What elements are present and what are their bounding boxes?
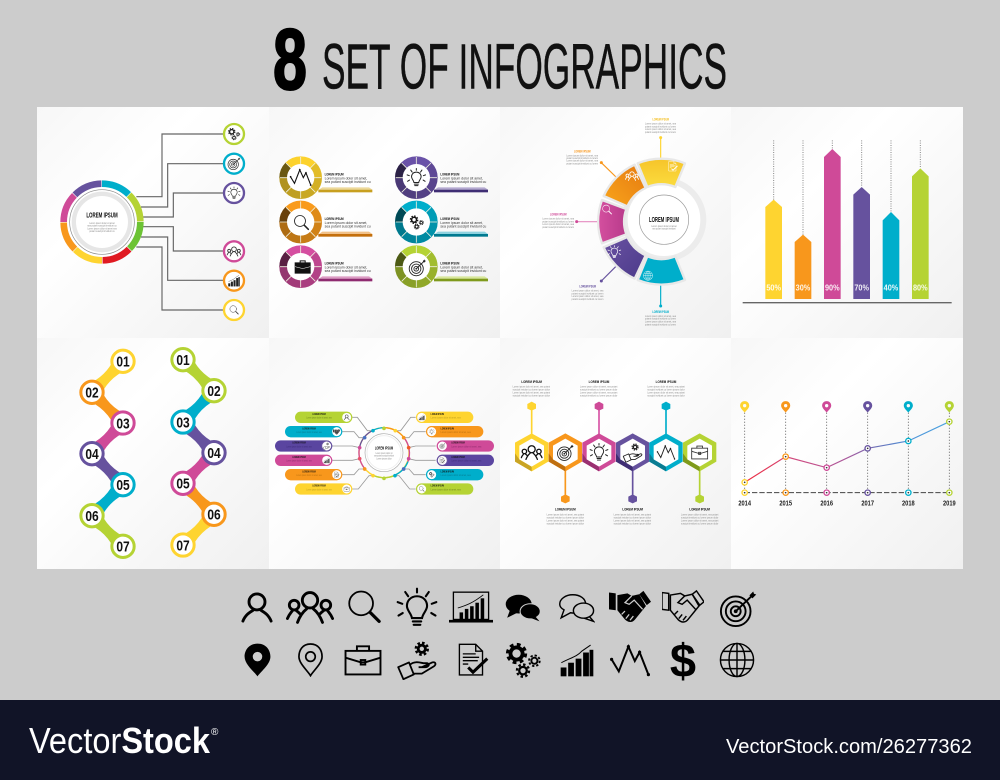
donut: magenta: sea putant suscipit invidunt cu [325, 269, 371, 273]
icon: chat solid [506, 595, 540, 621]
donut: purple: LOREM IPSUM [440, 172, 460, 177]
label: orange: putant suscipit invidunt cu lorem [566, 156, 599, 160]
label: purple: LOREM IPSUM [579, 285, 596, 289]
label: bottom 1 [547, 507, 584, 526]
label: orange: Lorem ipsum dolor sit amet, sea [566, 153, 598, 157]
label: top 3: Lorem ipsum dolor sit amet, sea putant [647, 391, 685, 395]
chain: left: 06 [85, 509, 99, 525]
chain: left: 02 [85, 386, 99, 402]
pill: magenta right [437, 440, 494, 452]
pill: orange left: LOREM IPSUM [302, 469, 316, 473]
hub ring: sea putant suscipit invidunt [374, 454, 394, 458]
label: magenta [542, 212, 575, 229]
donut: lime: Lorem ipsum dolor sit amet, [440, 266, 483, 270]
chain: left [81, 350, 134, 557]
logo: VectorStock [29, 720, 211, 761]
label: top 1: suscipit invidunt cu lorem ipsum dolor [513, 387, 550, 391]
label: top 3: Lorem ipsum dolor sit amet, sea putant [647, 384, 685, 388]
donut: teal: sea putant suscipit invidunt cu [440, 224, 486, 228]
icon: magnifier [224, 300, 244, 320]
pill: magenta left [275, 455, 332, 466]
label: bottom 1: suscipit invidunt cu lorem ipsum dolor [547, 522, 584, 526]
pins [740, 401, 954, 413]
pill: yellow right: Lorem ipsum dolor sit amet, sea [431, 417, 461, 420]
sector: yellow [638, 159, 685, 187]
pill: lime right: Lorem ipsum dolor sit amet, sea [431, 488, 461, 491]
chain: right: 01 [176, 353, 190, 369]
panel: hexagon timeline [500, 338, 732, 569]
sector: cyan [638, 256, 685, 285]
centre disc: Lorem ipsum dolor sit amet [89, 221, 115, 225]
label: top 2: suscipit invidunt cu lorem ipsum dolor [580, 387, 617, 391]
label: yellow: LOREM IPSUM [652, 118, 669, 122]
panel: bar chart [731, 107, 963, 338]
pill: lime left: LOREM IPSUM [312, 412, 326, 416]
icon: handshake solid [609, 591, 651, 622]
donut: yellow: Lorem ipsum dolor sit amet, [325, 177, 367, 181]
chain: right: 06 [207, 508, 221, 524]
dotted guides [745, 413, 949, 493]
pill: yellow left [295, 483, 352, 495]
icon: zigzag [610, 645, 650, 676]
pill: cyan right: LOREM IPSUM [441, 469, 455, 473]
label: purple [572, 285, 604, 301]
icon: bars [224, 271, 244, 291]
panel: timeline line chart [731, 338, 963, 569]
panel: half wheel [500, 107, 732, 338]
label: magenta: putant suscipit invidunt cu lorem [542, 219, 575, 223]
data nodes [742, 419, 952, 495]
chain: left: 05 [116, 478, 130, 494]
year labels: 2015 [779, 501, 792, 508]
label: cyan: Lorem ipsum dolor sit amet, sea [645, 314, 676, 318]
donut: magenta: LOREM IPSUM [325, 261, 344, 266]
icon: globe [720, 643, 754, 677]
label: bottom 3: Lorem ipsum dolor sit amet, sea putant [681, 512, 718, 516]
pill: magenta right: LOREM IPSUM [451, 441, 465, 445]
chain: left: 01 [116, 355, 130, 371]
bar: 70%: 70% [854, 283, 869, 292]
pill: purple left [275, 440, 332, 452]
label: bottom 2 [614, 507, 651, 526]
chain: left: 03 [116, 416, 130, 432]
label: bottom 3: Lorem ipsum dolor sit amet, sea putant [681, 519, 718, 523]
donut: orange: Lorem ipsum dolor sit amet, [325, 221, 367, 225]
icon: dollar: $ [670, 634, 696, 687]
label: bottom 1: suscipit invidunt cu lorem ipsum dolor [547, 515, 584, 519]
label: bottom 2: suscipit invidunt cu lorem ipsum dolor [614, 522, 651, 526]
label: top 1: Lorem ipsum dolor sit amet, sea putant [513, 391, 550, 395]
panel: numbered chains [37, 338, 269, 569]
donut: yellow: sea putant suscipit invidunt cu [325, 180, 371, 184]
year labels: 2017 [861, 501, 874, 508]
donut: teal [392, 197, 488, 247]
data line [745, 422, 949, 482]
panel: hub with pills [269, 338, 501, 569]
sector: orange [604, 165, 646, 206]
pill: orange right: Lorem ipsum dolor sit amet, sea [441, 431, 471, 434]
label: top 2: LOREM IPSUM [589, 379, 610, 384]
leader lines [575, 136, 662, 307]
chain: right: 07 [176, 538, 190, 554]
footer bar [0, 700, 1000, 780]
year labels: 2018 [902, 501, 915, 508]
chain: left: 04 [85, 447, 99, 463]
panel: six segmented donuts [269, 107, 501, 338]
chain: right: 05 [176, 477, 190, 493]
pill: lime right: LOREM IPSUM [431, 484, 445, 488]
label: magenta: LOREM IPSUM [550, 212, 567, 216]
pill: lime left: Lorem ipsum dolor sit amet, sea [306, 417, 332, 420]
label: bottom 2: Lorem ipsum dolor sit amet, sea putant [614, 512, 651, 516]
label: bottom 1: Lorem ipsum dolor sit amet, sea putant [547, 512, 584, 516]
icon: rising bars [561, 645, 593, 676]
label: orange: putant suscipit invidunt cu lorem [566, 162, 599, 166]
chain: right: 03 [176, 415, 190, 431]
label: top 1 [513, 379, 550, 398]
label: top 1: LOREM IPSUM [521, 379, 542, 384]
donut: lime: sea putant suscipit invidunt cu [440, 269, 486, 273]
bar: 30%: 30% [796, 283, 810, 292]
label: cyan: putant suscipit invidunt cu lorem [645, 317, 676, 321]
icon: gears [224, 124, 244, 144]
icon: handshake outline [662, 591, 704, 622]
bar: 70% [853, 187, 870, 299]
hub ring: Lorem ipsum dolor [376, 456, 392, 460]
pill: lime left [295, 412, 352, 423]
label: top 2: Lorem ipsum dolor sit amet, sea putant [580, 391, 617, 395]
label: purple: Lorem ipsum dolor sit amet, sea [572, 289, 604, 293]
centre disc: Lorem ipsum dolor sit amet sea [87, 226, 117, 230]
chain: right [172, 348, 225, 556]
registered mark: ® [211, 727, 219, 738]
label: bottom 3: LOREM IPSUM [689, 507, 710, 512]
donut: teal: Lorem ipsum dolor sit amet, [440, 221, 483, 225]
icon: bulb [398, 589, 436, 625]
label: bottom 2: LOREM IPSUM [622, 507, 643, 512]
title: 8 [273, 12, 307, 108]
centre disc: putant suscipit invidunt cu [89, 229, 115, 233]
pill: yellow right [416, 412, 473, 423]
bar: 40% [883, 212, 899, 299]
label: orange: LOREM IPSUM [574, 149, 591, 153]
image id: VectorStock.com/26277362 [726, 736, 972, 758]
chain: right: 04 [207, 446, 221, 462]
connector lines [332, 417, 436, 489]
donut: magenta [276, 242, 372, 291]
label: yellow: putant suscipit invidunt cu lorem [645, 130, 676, 134]
year labels: 2016 [820, 501, 833, 508]
year labels [738, 501, 956, 508]
donut: teal: LOREM IPSUM [440, 216, 460, 221]
pill: cyan right [426, 469, 483, 480]
donut: yellow: LOREM IPSUM [325, 172, 344, 177]
icon: people [287, 593, 333, 622]
donut: purple [392, 153, 488, 202]
label: purple: putant suscipit invidunt cu lorem [572, 291, 604, 295]
icon: pin outline [299, 644, 322, 676]
label: bottom 2: Lorem ipsum dolor sit amet, sea putant [614, 519, 651, 523]
pill: orange right [426, 426, 483, 437]
pill: cyan left: LOREM IPSUM [302, 426, 316, 430]
centre disc: sea putant suscipit invidunt [652, 227, 676, 231]
label: top 3 [647, 379, 685, 398]
icon: target [721, 592, 756, 626]
hexagon: hand gear [616, 433, 649, 471]
label: top 3: LOREM IPSUM [656, 379, 677, 384]
icon: target [224, 154, 244, 174]
segmented ring [48, 168, 156, 276]
centre disc: LOREM IPSUM [649, 217, 679, 224]
chain: left: 07 [116, 540, 130, 556]
hexagon: zigzag [649, 433, 683, 471]
label: purple: putant suscipit invidunt cu lorem [572, 297, 604, 301]
label: top 1: suscipit invidunt cu lorem ipsum dolor [513, 394, 550, 398]
donut: lime: LOREM IPSUM [440, 261, 460, 266]
icon: hand with gear [398, 643, 435, 679]
pill: yellow left: LOREM IPSUM [312, 484, 326, 488]
bar: 30% [795, 235, 811, 299]
label: magenta: Lorem ipsum dolor sit amet, sea [542, 217, 574, 221]
hexagon: bulb [582, 433, 616, 471]
label: top 2: suscipit invidunt cu lorem ipsum dolor [580, 394, 617, 398]
panel: circle with connected icons [37, 107, 269, 338]
hexagon: briefcase [683, 433, 716, 471]
pill: purple left: Lorem ipsum dolor sit amet, sea [286, 445, 312, 448]
label: top 2: Lorem ipsum dolor sit amet, sea putant [580, 384, 617, 388]
donut: orange: LOREM IPSUM [325, 216, 344, 221]
icon: document check [459, 644, 487, 675]
donut: purple: sea putant suscipit invidunt cu [440, 180, 486, 184]
label: bottom 3: suscipit invidunt cu lorem ipsum dolor [681, 522, 718, 526]
label: top 3: suscipit invidunt cu lorem ipsum dolor [647, 394, 685, 398]
donut: orange [276, 197, 372, 247]
bar: 90% [824, 149, 841, 299]
pill: purple right: Lorem ipsum dolor sit amet, sea [451, 460, 482, 463]
centre disc: Lorem ipsum dolor sit amet [651, 224, 677, 228]
bar: 80% [912, 168, 929, 299]
hub nodes [358, 426, 410, 480]
sector: purple [604, 237, 646, 279]
chain: right: 02 [207, 384, 221, 400]
label: top 3: suscipit invidunt cu lorem ipsum dolor [647, 387, 685, 391]
stems [532, 406, 700, 499]
icon: chat outline [560, 595, 594, 621]
donut: lime [392, 242, 488, 291]
label: yellow [645, 118, 676, 134]
small hexagons [527, 402, 704, 503]
pill: purple right: LOREM IPSUM [451, 455, 465, 459]
label: orange [566, 149, 599, 166]
hub ring [359, 428, 409, 478]
label: cyan [645, 310, 676, 326]
label: bottom 3 [681, 507, 718, 526]
bar: 80%: 80% [913, 283, 928, 292]
label: top 2 [580, 379, 617, 398]
connector lines [136, 134, 224, 310]
hub ring: LOREM IPSUM [375, 445, 393, 450]
bar: 50% [765, 200, 782, 299]
label: cyan: putant suscipit invidunt cu lorem [645, 322, 676, 326]
icon: gears [507, 644, 540, 677]
label: bottom 1: Lorem ipsum dolor sit amet, sea putant [547, 519, 584, 523]
pill: orange right: LOREM IPSUM [441, 426, 455, 430]
icon row: top [243, 589, 756, 626]
label: yellow: putant suscipit invidunt cu lorem [645, 124, 676, 128]
label: yellow: Lorem ipsum dolor sit amet, sea [645, 122, 676, 126]
title [273, 12, 727, 108]
label: bottom 2: suscipit invidunt cu lorem ipsum dolor [614, 515, 651, 519]
donut: purple: Lorem ipsum dolor sit amet, [440, 177, 483, 181]
baseline [745, 491, 949, 494]
icon: person [243, 594, 271, 621]
donut: orange: sea putant suscipit invidunt cu [325, 224, 371, 228]
bar: 50%: 50% [766, 283, 781, 292]
label: bottom 1: LOREM IPSUM [555, 507, 576, 512]
label: orange: Lorem ipsum dolor sit amet, sea [566, 159, 598, 163]
pill: yellow right: LOREM IPSUM [431, 412, 445, 416]
icon: laptop chart [449, 592, 493, 623]
centre disc: LOREM IPSUM [86, 210, 118, 219]
label: magenta: Lorem ipsum dolor sit amet, sea [542, 222, 574, 226]
pill: purple right [437, 455, 494, 466]
axis line [743, 301, 952, 305]
centre disc [625, 180, 703, 259]
node centres [744, 421, 950, 493]
label: magenta: putant suscipit invidunt cu lorem [542, 225, 575, 229]
label: purple: Lorem ipsum dolor sit amet, sea [572, 294, 604, 298]
pill: cyan left: Lorem ipsum dolor sit amet, sea [296, 431, 322, 434]
centre disc: sea putant suscipit invidunt cu [87, 224, 117, 228]
label: cyan: Lorem ipsum dolor sit amet, sea [645, 319, 676, 323]
pill: cyan left [285, 426, 342, 437]
pill: magenta right: Lorem ipsum dolor sit amet, sea [451, 445, 482, 448]
hexagon: target [549, 433, 582, 471]
icon: magnifier [349, 592, 379, 621]
label: bottom 3: suscipit invidunt cu lorem ipsum dolor [681, 515, 718, 519]
icon: people [224, 241, 244, 261]
icon: bulb [224, 183, 244, 203]
icon: pin solid [245, 644, 270, 676]
hexagon: people [515, 433, 548, 471]
icon: briefcase [346, 646, 380, 674]
pill: lime right [416, 483, 473, 495]
pill: magenta left: Lorem ipsum dolor sit amet, sea [286, 460, 312, 463]
hub ring: Lorem ipsum dolor sit [376, 451, 392, 455]
donut: yellow [276, 153, 372, 202]
label: cyan: LOREM IPSUM [652, 310, 669, 314]
pill: orange left [285, 469, 342, 480]
year labels: 2019 [943, 501, 956, 508]
pill: purple left: LOREM IPSUM [292, 441, 306, 445]
pill: magenta left: LOREM IPSUM [292, 455, 306, 459]
pill: yellow left: Lorem ipsum dolor sit amet, sea [306, 488, 332, 491]
bar: 40%: 40% [884, 283, 898, 292]
bar: 90%: 90% [825, 283, 840, 292]
dotted guide lines [774, 140, 920, 235]
label: top 1: Lorem ipsum dolor sit amet, sea putant [513, 384, 550, 388]
centre disc [67, 187, 137, 257]
sector: magenta [598, 200, 626, 243]
pill: cyan right: Lorem ipsum dolor sit amet, sea [441, 474, 471, 477]
pill: orange left: Lorem ipsum dolor sit amet, sea [296, 474, 322, 477]
icon row: bottom [245, 634, 754, 687]
donut: magenta: Lorem ipsum dolor sit amet, [325, 266, 367, 270]
year labels: 2014 [738, 501, 751, 508]
label: yellow: Lorem ipsum dolor sit amet, sea [645, 127, 676, 131]
